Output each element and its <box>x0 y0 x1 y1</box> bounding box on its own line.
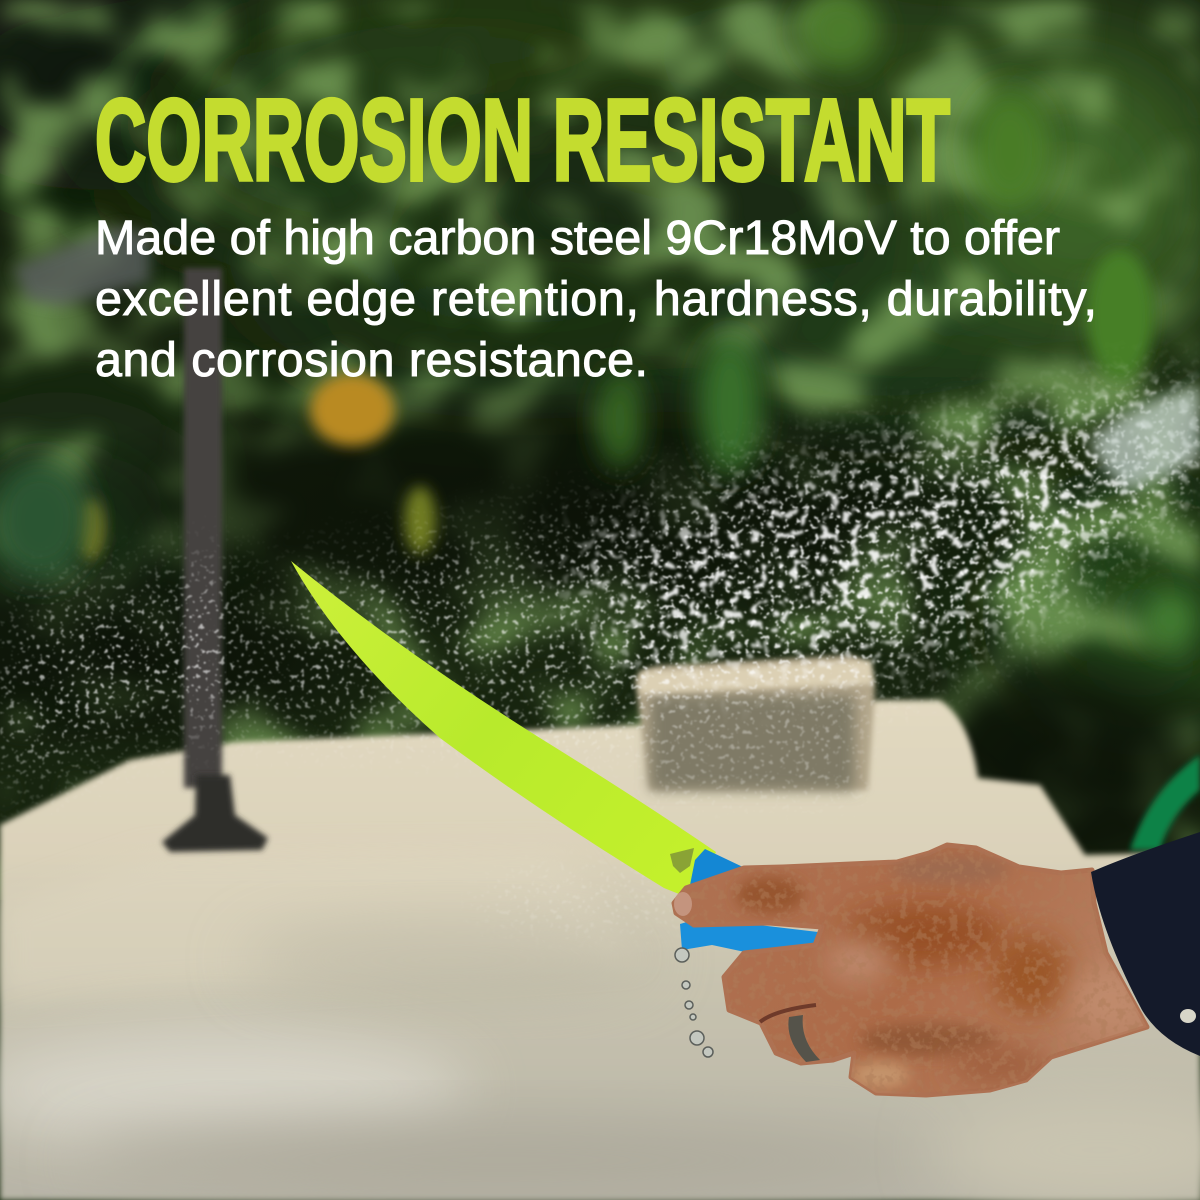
description text: Made of high carbon steel 9Cr18MoV to offer <box>95 211 1060 265</box>
fingernail <box>674 892 692 916</box>
background hose <box>1130 755 1200 850</box>
background sink box <box>635 655 875 790</box>
handle <box>680 849 818 952</box>
blade <box>291 561 716 900</box>
background post and base <box>162 268 268 852</box>
description text <box>95 211 1097 387</box>
blade logo <box>670 848 694 873</box>
water spray <box>0 350 1200 926</box>
description text: excellent edge retention, hardness, durability, <box>95 272 1097 326</box>
sleeve <box>1091 832 1200 1056</box>
hand <box>672 842 1150 1098</box>
background leaves and highlights <box>0 0 1196 650</box>
water drips from handle <box>675 948 713 1057</box>
background security camera <box>14 226 150 306</box>
fillet knife <box>291 561 818 952</box>
description text: and corrosion resistance. <box>95 333 648 387</box>
table surface <box>0 700 1200 1200</box>
hose stream <box>1090 385 1200 490</box>
photo background: blurred foliage <box>0 0 1200 900</box>
finger gap <box>760 1005 816 1022</box>
ring tattoo <box>788 1015 820 1062</box>
